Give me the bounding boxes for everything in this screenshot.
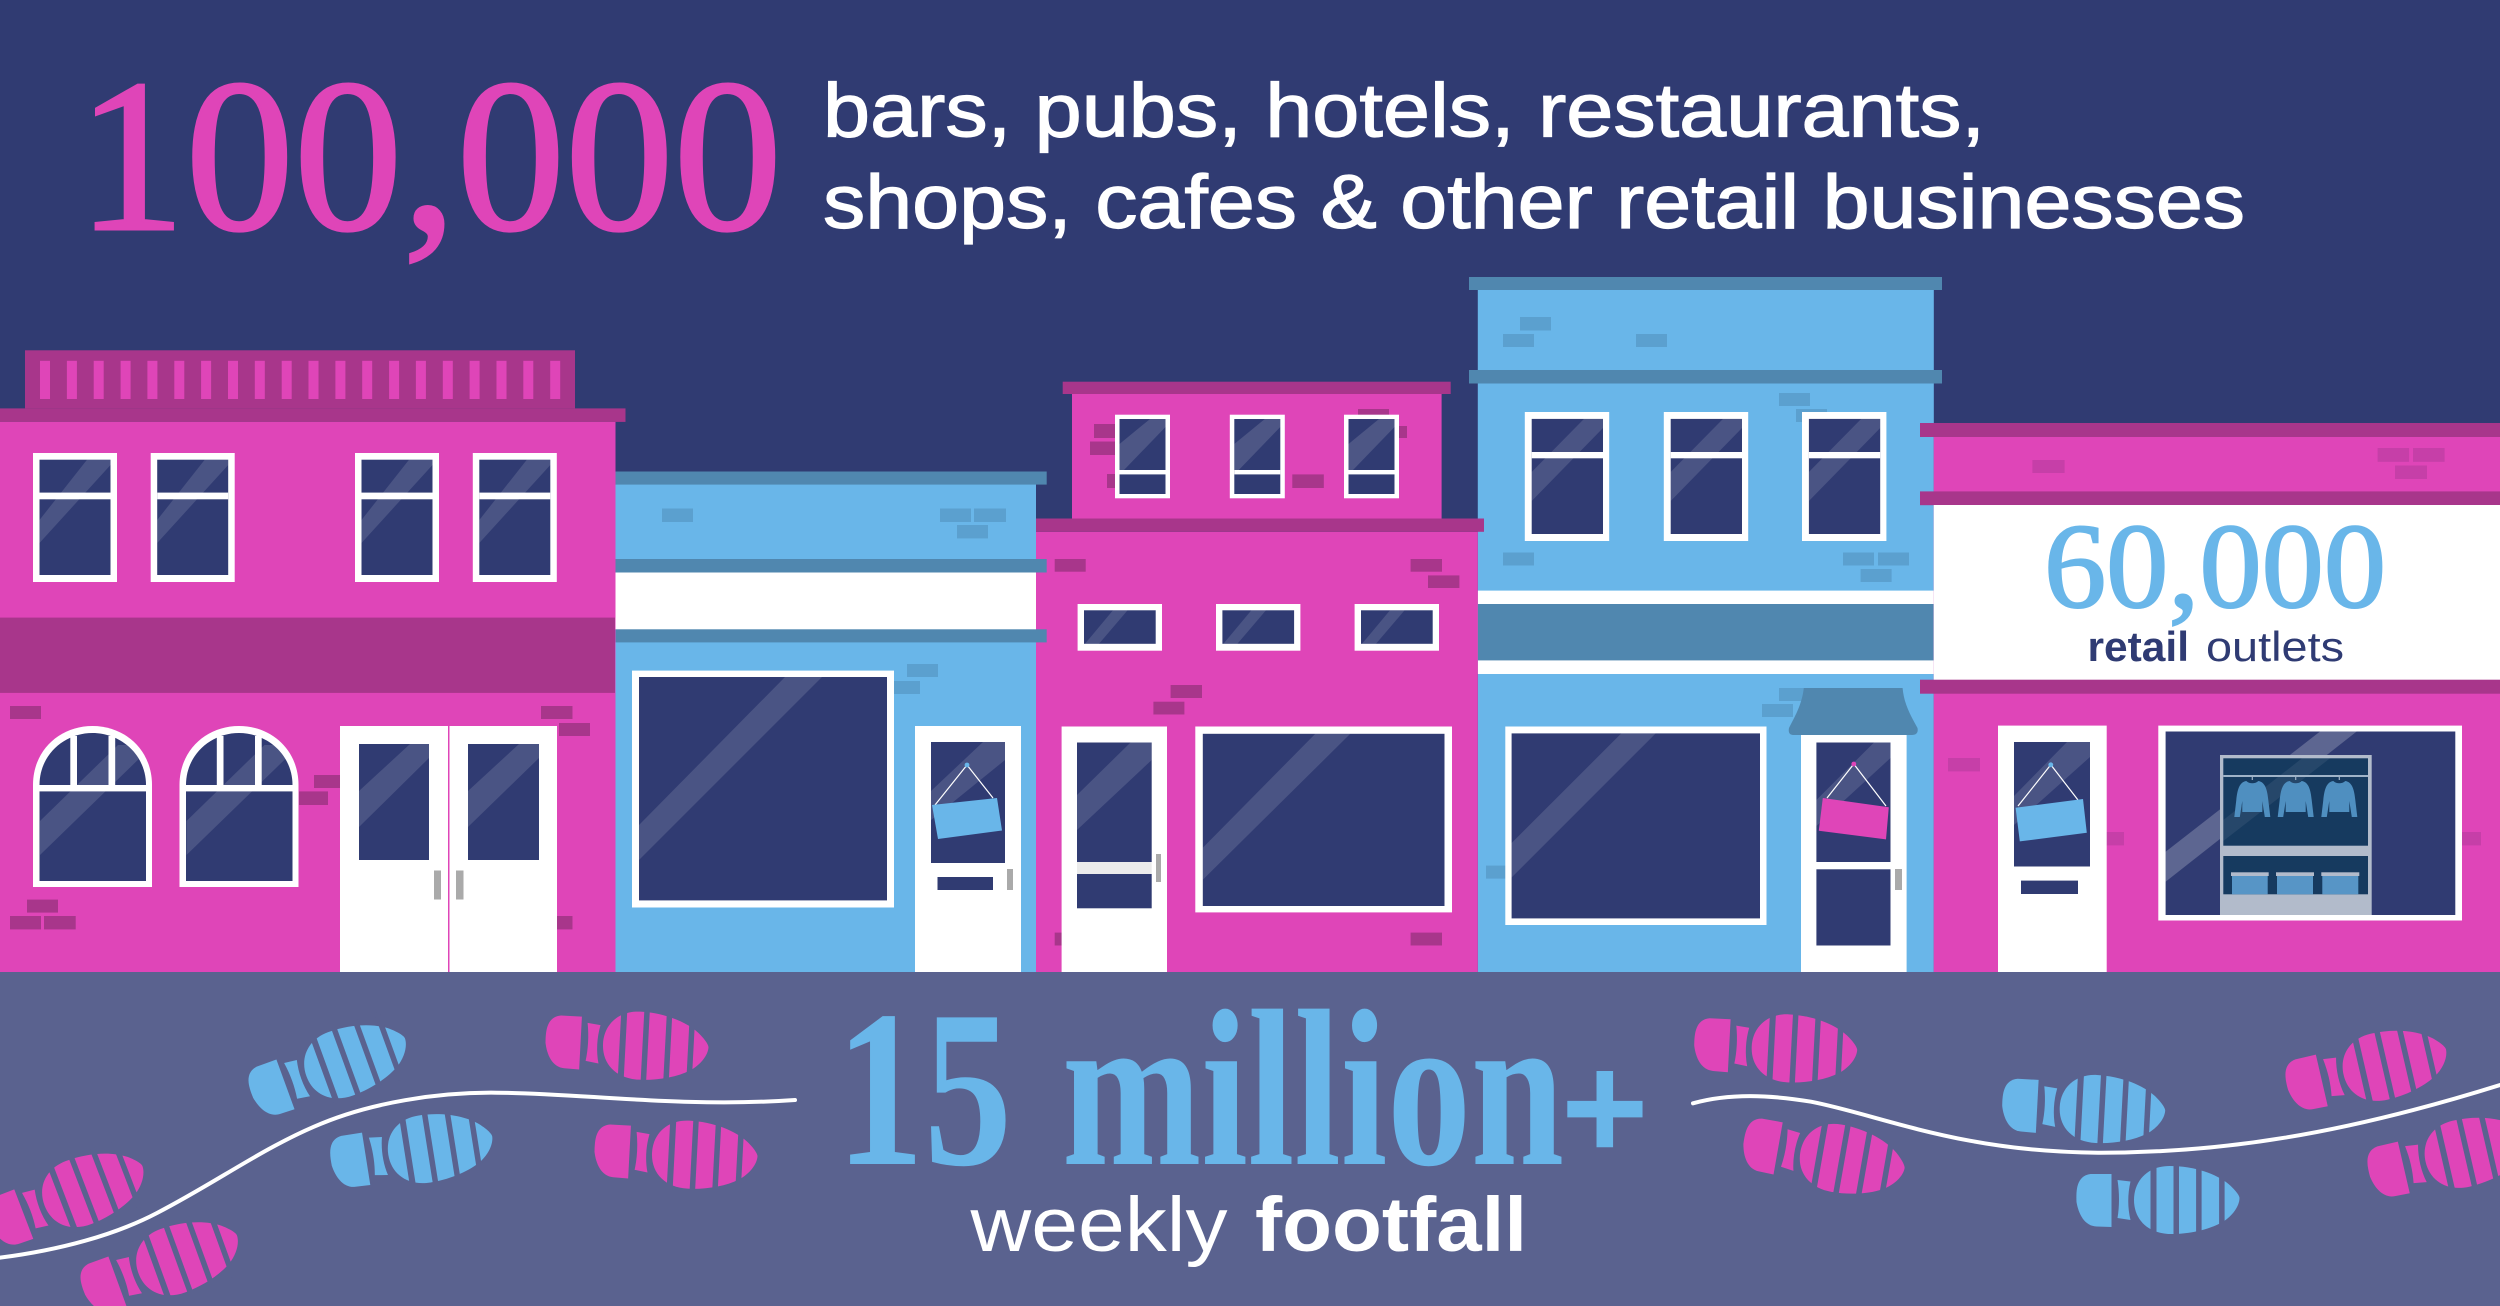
headline number: 100,000: 100,000 [77, 36, 782, 277]
number: 60,000: 60,000 [2044, 500, 2386, 634]
awning [1789, 688, 1918, 735]
building: small blue shop [615, 472, 1047, 972]
number: 15 million+: 15 [836, 965, 1012, 1213]
label: retail outlets: outlets [2206, 623, 2344, 670]
shop window [632, 671, 894, 908]
door with hanging pink sign [1801, 730, 1907, 972]
building: pink three-storey shop [1036, 382, 1484, 972]
middle floor windows [1078, 604, 1439, 651]
double doors [340, 726, 557, 972]
door with hanging blue sign [1998, 726, 2107, 972]
fascia band [0, 618, 615, 693]
headline description [823, 69, 2245, 245]
headline description: bars, pubs, hotels, restaurants, [823, 69, 1985, 154]
shop window [1505, 726, 1766, 925]
building: pink shop with 60,000 sign [1920, 423, 2500, 972]
label: weekly footfall: footfall [1255, 1182, 1527, 1268]
fascia band [1478, 591, 1934, 674]
parapet with railing [25, 350, 575, 408]
blank sign fascia [615, 559, 1047, 642]
label: weekly footfall [969, 1182, 1527, 1268]
upper windows [33, 453, 557, 582]
upper windows [1525, 412, 1886, 541]
headline description: shops, cafes & other retail businesses [823, 160, 2245, 245]
walking route left [0, 1093, 795, 1258]
number: 15 million+ [836, 965, 1649, 1213]
label: weekly footfall: weekly [969, 1182, 1228, 1268]
walking route right [1693, 1085, 2500, 1153]
arched windows [33, 726, 298, 887]
shop window with clothes display [2158, 726, 2462, 920]
number: 15 million+: + [1561, 1023, 1649, 1191]
footprints left group [0, 1005, 759, 1306]
door [1062, 726, 1167, 972]
top floor windows [1115, 415, 1399, 498]
number: 15 million+: million [1062, 965, 1564, 1213]
label: retail outlets [2088, 623, 2344, 670]
clothes rail and shelving [2220, 755, 2372, 915]
label: retail outlets: retail [2088, 623, 2189, 670]
footprints right group [1692, 1007, 2500, 1236]
building: tall blue shop [1469, 277, 1942, 972]
building: large pink pub [0, 350, 626, 972]
shop window [1195, 726, 1452, 912]
pavement band [0, 972, 2500, 1306]
door with hanging blue sign [915, 726, 1021, 972]
